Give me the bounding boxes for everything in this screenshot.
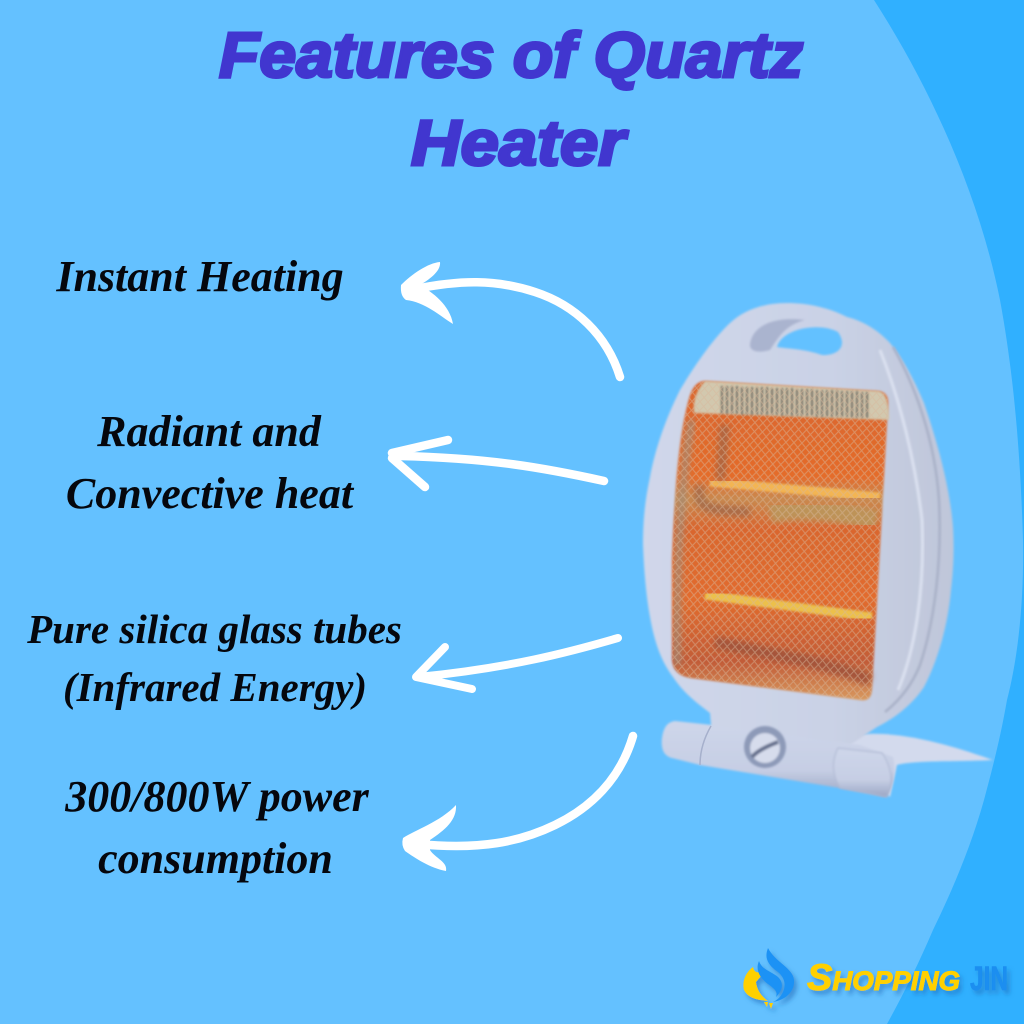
- lower dark shade: [715, 642, 870, 680]
- handle recess: [750, 319, 805, 352]
- feature label: Radiant and Convective heat: Radiant and: [96, 407, 322, 456]
- lower tube: [705, 595, 872, 617]
- left cap seam: [700, 726, 711, 765]
- heater front edge highlight: [880, 350, 923, 690]
- logo flame icon: [743, 948, 794, 1009]
- feature label: Pure silica glass tubes: [26, 606, 402, 710]
- feature label: Pure silica glass tubes: (Infrared Energy): [63, 664, 367, 710]
- arrow: to Radiant and Convective heat: [392, 440, 604, 487]
- feature label: Radiant and Convective heat: [66, 407, 355, 518]
- heater foot: [830, 734, 993, 797]
- feature label: Radiant and Convective heat: Convective heat: [66, 469, 355, 518]
- logo: Shopping Jin: [743, 948, 1008, 1009]
- upper left dark shade: [699, 425, 750, 512]
- reflector slots: [722, 386, 867, 418]
- reflector strip: [694, 381, 889, 420]
- left edge shade: [677, 420, 692, 665]
- feature label: Pure silica glass tubes: Pure silica glass tubes: [26, 606, 402, 652]
- heater side seam: [885, 347, 940, 712]
- title: Heater: [411, 107, 628, 179]
- arrow: to power consumption: [402, 736, 633, 871]
- arrow: to Instant Heating: [401, 262, 620, 377]
- upper tube: [710, 482, 880, 497]
- grille: [672, 381, 889, 700]
- upper tube reflection: [770, 510, 877, 520]
- feature label: Instant Heating: Instant Heating: [55, 252, 344, 301]
- logo wordmark: JIN: [970, 960, 1008, 998]
- wire mesh: [672, 381, 888, 700]
- feature label: 300/800W power consumption: [64, 772, 370, 883]
- control knob: [744, 726, 786, 768]
- heater body: [643, 303, 954, 745]
- feature label: 300/800W power consumption: 300/800W power: [64, 772, 370, 821]
- heater illustration: [643, 303, 993, 797]
- arrow: to Pure silica glass tubes: [416, 638, 618, 689]
- feature label: 300/800W power consumption: consumption: [98, 834, 333, 883]
- title: Features of Quartz: [219, 19, 803, 91]
- handle opening: [777, 327, 842, 355]
- right cap: [833, 748, 891, 797]
- logo wordmark: SHOPPING: [807, 957, 960, 998]
- base cylinder: [662, 721, 894, 797]
- right curved band: [874, 0, 1024, 1024]
- title: [219, 19, 803, 179]
